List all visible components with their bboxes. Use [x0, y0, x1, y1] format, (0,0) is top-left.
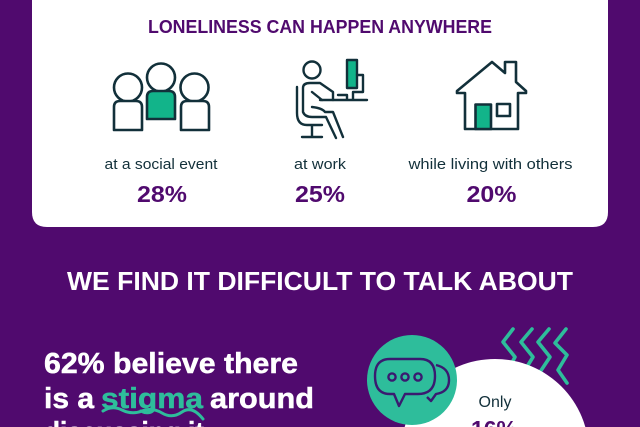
- white circle callout: only 16%: [401, 359, 589, 427]
- panel heading: LONELINESS CAN HAPPEN ANYWHERE: [148, 16, 492, 37]
- zigzag decoration: [503, 329, 567, 383]
- squiggle underline: [103, 408, 203, 419]
- icon: house: [457, 62, 526, 129]
- stat: 28%: 28%: [137, 181, 187, 207]
- text block: stigma statistic: 62% believe there: [44, 348, 298, 380]
- label: while living with others: while living with others: [407, 157, 572, 173]
- icon: speech bubbles on green circle: [367, 335, 457, 425]
- label: at a social event: at a social event: [104, 157, 218, 173]
- panel: loneliness can happen anywhere: [32, 0, 608, 227]
- text block: stigma statistic: is a: [44, 383, 95, 415]
- icon: group of people: [114, 64, 209, 130]
- text block: stigma statistic: around: [210, 383, 314, 415]
- label: at work: at work: [294, 157, 347, 173]
- text block: stigma statistic: [44, 348, 314, 427]
- stat: 25%: 25%: [295, 181, 345, 207]
- icon: person at desk: [297, 60, 367, 138]
- heading: difficult to talk about: WE FIND IT DIFFICULT TO TALK ABOUT: [67, 266, 573, 296]
- callout label: Only: [479, 394, 511, 411]
- stat: 20%: 20%: [466, 181, 516, 207]
- text block: stigma statistic: stigma: [101, 383, 204, 415]
